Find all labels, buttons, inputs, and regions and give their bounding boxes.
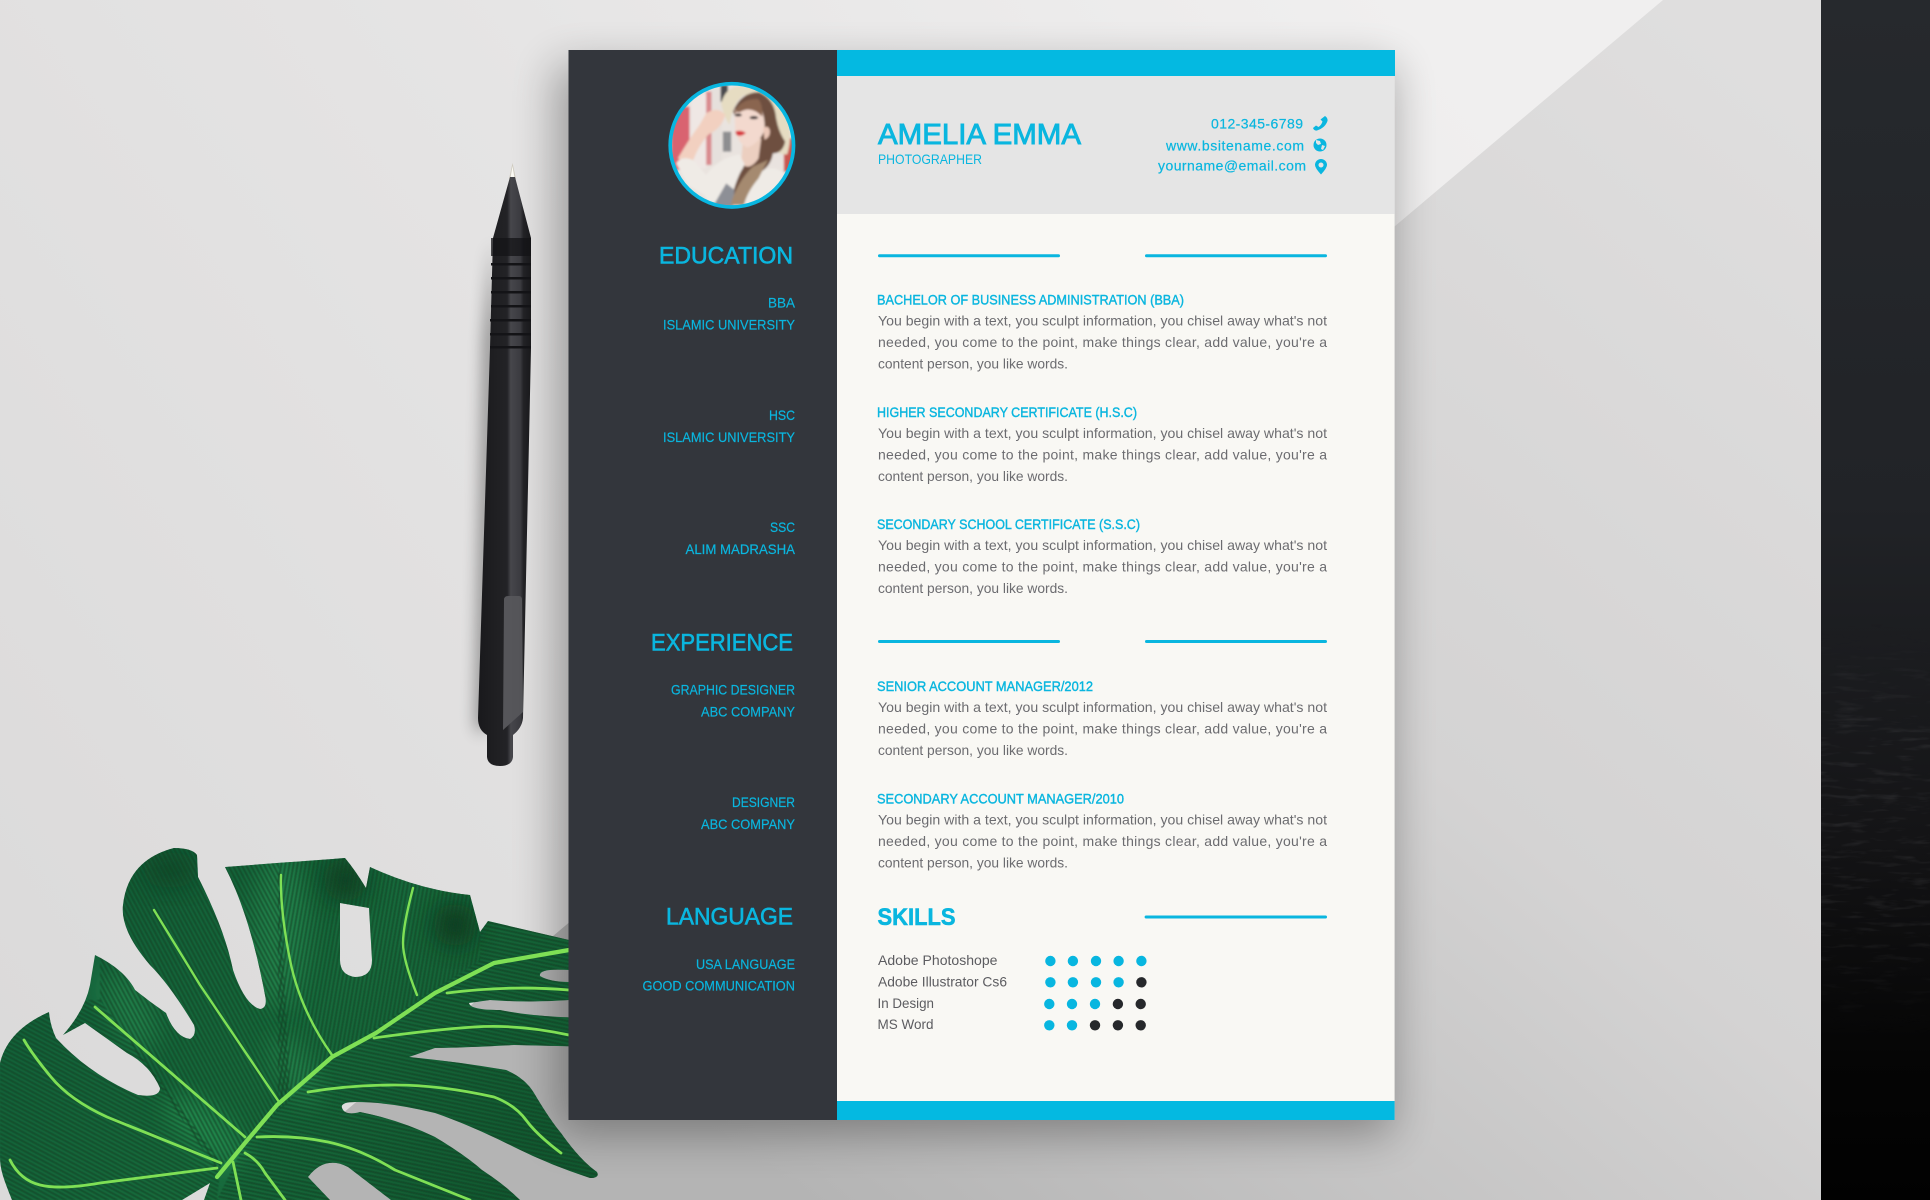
skill labels <box>878 952 1007 1032</box>
entry: bachelor: content person, you like words. <box>878 355 1068 371</box>
skill labels: MS Word <box>878 1016 934 1032</box>
header grey band <box>837 76 1395 214</box>
sidebar panel <box>568 50 837 1120</box>
skill rating dots <box>1044 956 1147 1030</box>
entry: higher secondary: needed, you come to the point, make things clear, add value, you're a <box>878 446 1327 462</box>
name: AMELIA EMMA <box>878 119 1082 151</box>
entry: higher secondary <box>877 405 1327 484</box>
dark side panel <box>1821 0 1930 1200</box>
language entry: GOOD COMMUNICATION <box>642 978 795 994</box>
entry: secondary account manager: SECONDARY ACCOUNT MANAGER/2010 <box>877 791 1124 806</box>
icon: globe <box>1314 138 1326 152</box>
monstera leaf <box>0 840 610 1200</box>
education entry: BBA: BBA <box>768 295 796 311</box>
entry: secondary account manager: content person, you like words. <box>878 854 1068 870</box>
skill labels: Adobe Photoshope <box>878 952 998 968</box>
pen <box>476 163 531 766</box>
email: yourname@email.com <box>1158 158 1306 174</box>
education entry: SSC: SSC <box>770 519 795 535</box>
education entry: HSC: HSC <box>769 407 795 423</box>
education entry: HSC: ISLAMIC UNIVERSITY <box>663 429 796 445</box>
website: www.bsitename.com <box>1165 138 1304 154</box>
experience entry: designer: DESIGNER <box>732 794 795 810</box>
heading: education: EDUCATION <box>659 243 793 270</box>
entry: bachelor: You begin with a text, you sculpt information, you chisel away what's not <box>878 312 1327 328</box>
entry: bachelor: needed, you come to the point, make things clear, add value, you're a <box>878 334 1327 350</box>
entry: secondary school: You begin with a text, you sculpt information, you chisel away what's not <box>878 537 1327 553</box>
skill labels: Adobe Illustrator Cs6 <box>878 974 1007 990</box>
profile photo <box>668 82 798 212</box>
divider: experience <box>878 640 1327 643</box>
entry: secondary school: SECONDARY SCHOOL CERTIFICATE (S.S.C) <box>877 517 1140 532</box>
experience list <box>877 679 1327 870</box>
icon: map pin <box>1315 159 1327 174</box>
language entry: USA LANGUAGE <box>696 956 795 972</box>
language entry <box>642 956 795 994</box>
resume shadow <box>556 66 1392 1134</box>
experience entry: graphic designer: GRAPHIC DESIGNER <box>671 682 795 698</box>
main paper <box>837 50 1395 1120</box>
sidebar: education <box>659 243 796 557</box>
entry: secondary account manager: needed, you come to the point, make things clear, add value, you're a <box>878 833 1327 849</box>
education entry: BBA: ISLAMIC UNIVERSITY <box>663 317 796 333</box>
skill labels: In Design <box>878 995 934 1011</box>
top blue bar <box>837 50 1395 76</box>
education entry: HSC <box>663 407 796 445</box>
icon: phone <box>1313 116 1328 131</box>
experience entry: designer <box>701 794 796 832</box>
experience entry: designer: ABC COMPANY <box>701 816 796 832</box>
entry: higher secondary: content person, you like words. <box>878 468 1068 484</box>
experience entry: graphic designer <box>671 682 796 720</box>
education entry: BBA <box>663 295 796 333</box>
entry: senior account manager: You begin with a text, you sculpt information, you chisel away what's not <box>878 699 1327 715</box>
bottom blue bar <box>837 1101 1395 1120</box>
entry: higher secondary: You begin with a text, you sculpt information, you chisel away what's not <box>878 425 1327 441</box>
entry: secondary account manager <box>877 791 1327 870</box>
entry: secondary school: content person, you like words. <box>878 580 1068 596</box>
sidebar: language <box>642 904 795 994</box>
entry: senior account manager: SENIOR ACCOUNT MANAGER/2012 <box>877 679 1093 694</box>
education entry: SSC <box>686 519 796 557</box>
heading: experience: EXPERIENCE <box>651 630 793 657</box>
name block <box>878 119 1082 167</box>
entry: bachelor <box>877 292 1327 371</box>
contact details <box>1158 116 1328 174</box>
entry: bachelor: BACHELOR OF BUSINESS ADMINISTRATION (BBA) <box>877 292 1184 307</box>
skills divider <box>1145 916 1327 918</box>
job title: PHOTOGRAPHER <box>878 151 982 167</box>
photo ring <box>670 84 794 207</box>
skills section <box>878 904 1327 1032</box>
entry: senior account manager <box>877 679 1327 758</box>
entry: secondary school <box>877 517 1327 596</box>
sidebar: experience <box>651 630 796 832</box>
heading: skills: SKILLS <box>878 904 956 931</box>
entry: higher secondary: HIGHER SECONDARY CERTIFICATE (H.S.C) <box>877 405 1137 420</box>
divider: education <box>878 254 1327 257</box>
resume sheet <box>568 50 1395 1120</box>
experience entry: graphic designer: ABC COMPANY <box>701 704 796 720</box>
phone: 012-345-6789 <box>1211 116 1303 132</box>
entry: secondary school: needed, you come to the point, make things clear, add value, you're a <box>878 558 1327 574</box>
entry: senior account manager: content person, you like words. <box>878 742 1068 758</box>
entry: senior account manager: needed, you come to the point, make things clear, add value, you're a <box>878 720 1327 736</box>
education list <box>877 292 1327 596</box>
entry: secondary account manager: You begin with a text, you sculpt information, you chisel away what's not <box>878 811 1327 827</box>
education entry: SSC: ALIM MADRASHA <box>686 541 796 557</box>
heading: language: LANGUAGE <box>666 904 793 931</box>
